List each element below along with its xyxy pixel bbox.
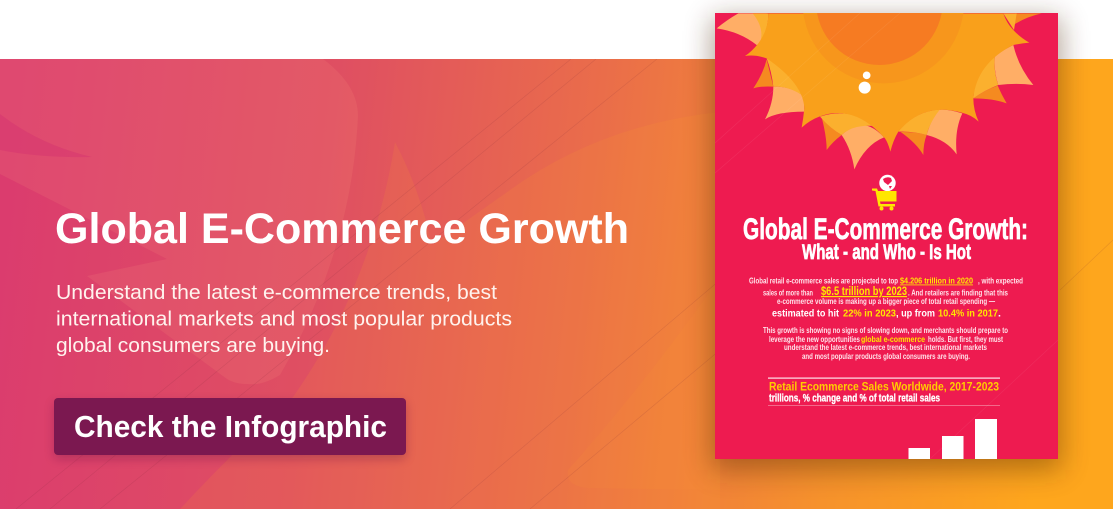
card intro paragraph: 22% in 2023 xyxy=(843,308,896,320)
icon: shopping cart with globe xyxy=(872,175,896,210)
card second paragraph: and most popular products global consumers are buying. xyxy=(802,352,970,361)
card intro paragraph: . And retailers are finding that this xyxy=(908,288,1008,298)
faint diagonal lines over card xyxy=(715,13,1058,459)
card second paragraph: This growth is showing no signs of slowing down, and merchants should prepare to xyxy=(763,326,1008,335)
description text: global consumers are buying. xyxy=(56,334,330,357)
card title: What - and Who - Is Hot xyxy=(802,241,971,264)
card intro paragraph: estimated to hit xyxy=(772,308,839,320)
card intro paragraph: . xyxy=(998,308,1001,320)
left rays xyxy=(765,87,804,119)
right rays xyxy=(995,45,1033,85)
card second paragraph xyxy=(763,326,1008,361)
card intro paragraph: , up from xyxy=(896,308,935,320)
headline: Global E-Commerce Growth xyxy=(55,205,629,253)
button: check the infographic: Check the Infographic xyxy=(74,409,387,444)
sun body xyxy=(745,13,1029,152)
chart heading xyxy=(768,378,1000,406)
description text: international markets and most popular products xyxy=(56,308,512,330)
card second paragraph: understand the latest e-commerce trends, best international markets xyxy=(784,343,987,352)
card second paragraph: holds. But first, they must xyxy=(928,335,1003,344)
sun inner ring xyxy=(803,13,964,83)
card second paragraph: global e-commerce xyxy=(861,335,925,344)
background leaf shapes xyxy=(0,59,622,509)
sun illustration xyxy=(717,0,1042,169)
card intro paragraph: $4.206 trillion in 2020 xyxy=(900,276,973,286)
card intro paragraph: Global retail e-commerce sales are projected to top xyxy=(749,276,898,286)
button: check the infographic xyxy=(54,398,406,459)
card intro paragraph: , with expected xyxy=(978,276,1023,286)
infographic preview card xyxy=(715,0,1058,459)
small dots xyxy=(859,71,871,94)
top-right ray xyxy=(1015,13,1042,24)
top-left ray xyxy=(717,13,767,45)
chart heading: trillions, % change and % of total retail sales xyxy=(769,392,940,404)
card intro paragraph: $6.5 trillion by 2023 xyxy=(821,286,907,298)
bar chart xyxy=(908,419,997,459)
infographic card shadow xyxy=(712,18,1061,470)
card title xyxy=(743,213,1028,264)
card intro paragraph: e-commerce volume is making up a bigger piece of total retail spending — xyxy=(777,297,996,306)
description text xyxy=(56,281,512,357)
card intro paragraph: 10.4% in 2017 xyxy=(938,308,998,320)
chart heading: Retail Ecommerce Sales Worldwide, 2017-2023 xyxy=(769,382,999,394)
card intro paragraph: sales of more than xyxy=(763,288,813,298)
lower rays xyxy=(842,125,884,169)
sun core xyxy=(817,13,942,65)
card second paragraph: leverage the new opportunities xyxy=(769,335,860,344)
description text: Understand the latest e-commerce trends, best xyxy=(56,281,497,304)
card intro paragraph xyxy=(749,276,1023,320)
